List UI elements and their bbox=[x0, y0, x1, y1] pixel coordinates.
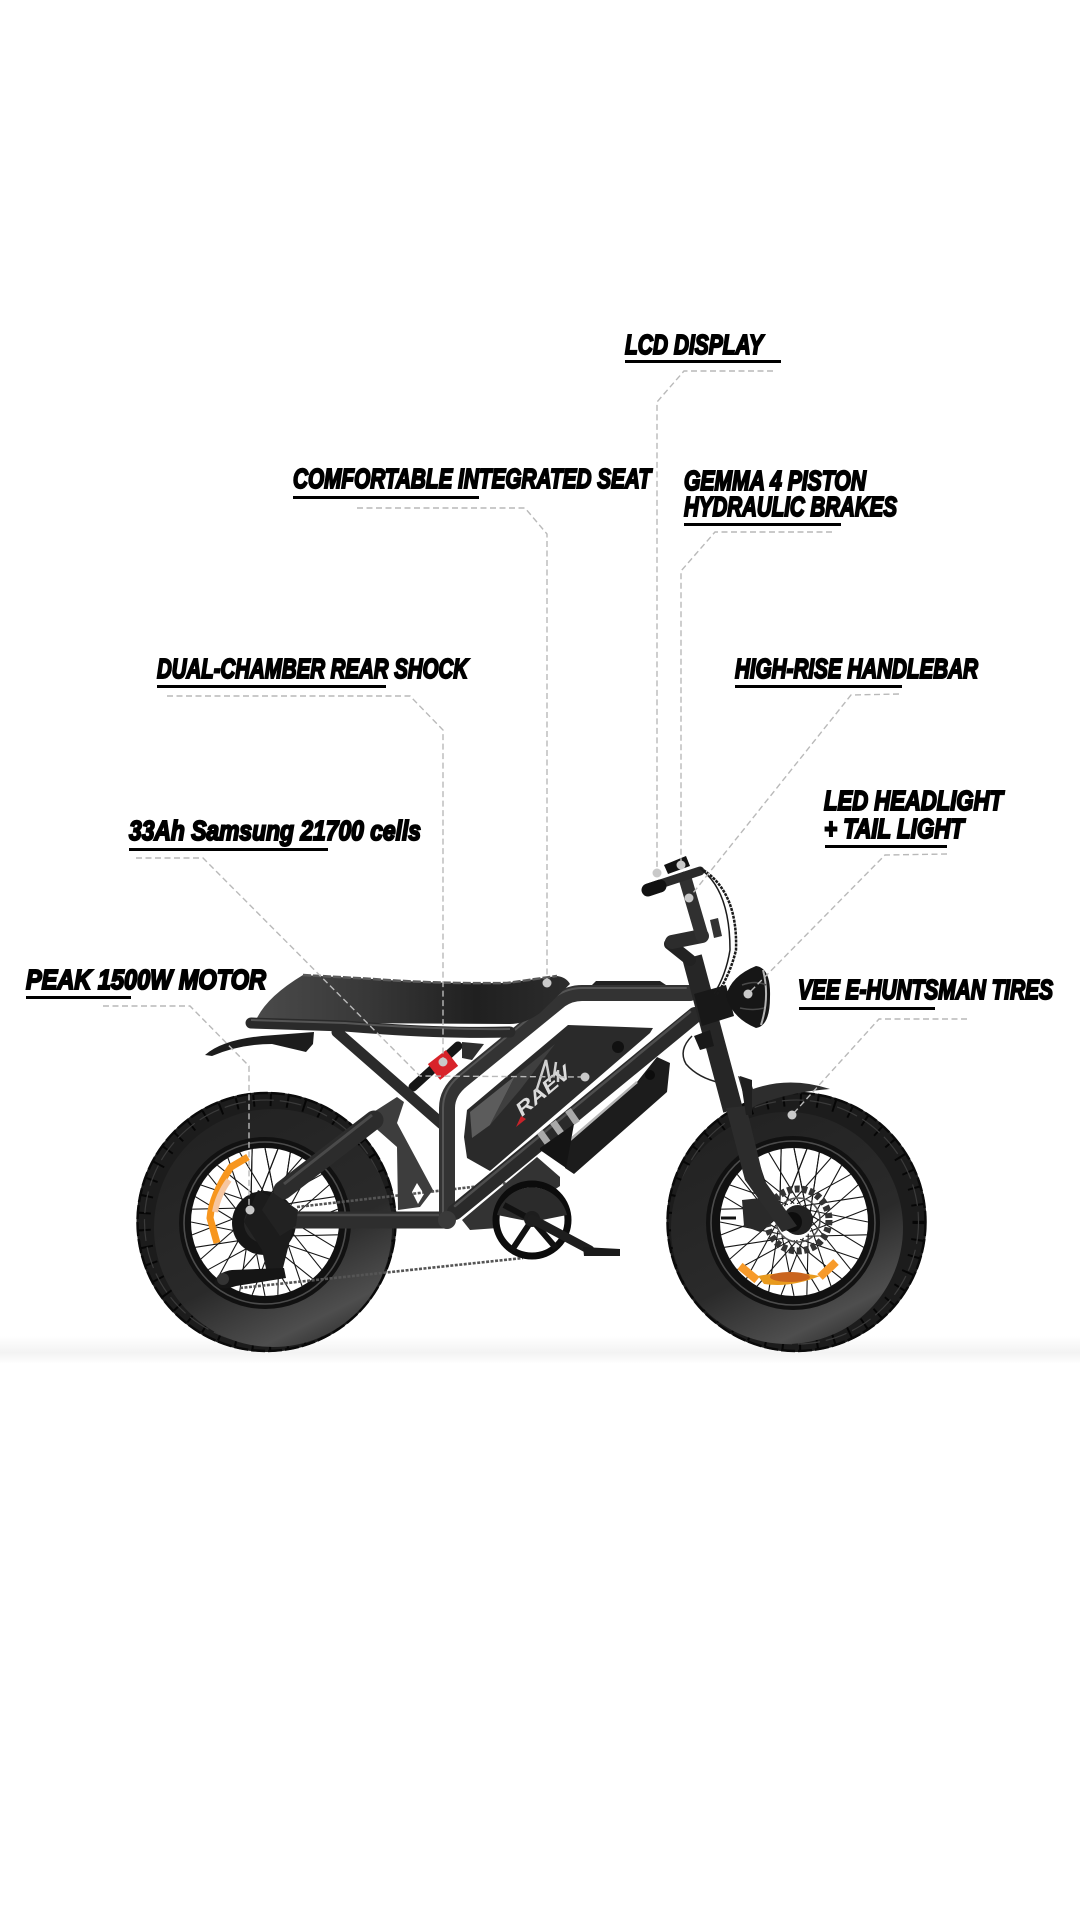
callout: hydraulic brakes bbox=[676, 465, 897, 870]
fork bbox=[692, 957, 797, 1232]
callout: hydraulic brakes: HYDRAULIC BRAKES bbox=[684, 491, 897, 522]
callout: motor bbox=[26, 964, 267, 1214]
callout: rear shock bbox=[157, 653, 469, 1066]
front reflectors bbox=[740, 1262, 836, 1285]
headlight bbox=[726, 966, 770, 1028]
callout: headlight and tail light: + TAIL LIGHT bbox=[824, 813, 966, 844]
chain bbox=[240, 1183, 523, 1288]
rear fender bbox=[205, 1032, 314, 1056]
seat strut bbox=[337, 1032, 442, 1124]
callout: headlight and tail light bbox=[744, 785, 1005, 998]
battery logo: RAEV bbox=[512, 1061, 577, 1121]
callout: rear shock: DUAL-CHAMBER REAR SHOCK bbox=[157, 653, 469, 684]
callout: LCD display: LCD DISPLAY bbox=[625, 329, 765, 360]
callout: handlebar: HIGH-RISE HANDLEBAR bbox=[735, 653, 979, 684]
seat rail bbox=[251, 1020, 510, 1032]
brake cable bbox=[683, 1036, 721, 1083]
callout: comfortable integrated seat: COMFORTABLE INTEGRATED SEAT bbox=[293, 463, 653, 494]
rear reflector bbox=[210, 1157, 248, 1243]
front wheel bbox=[666, 1092, 926, 1352]
top tube display plate bbox=[592, 981, 666, 985]
stem and handlebar bbox=[648, 856, 722, 960]
seat bbox=[257, 975, 570, 1024]
battery bbox=[464, 1025, 653, 1171]
ground shadow bbox=[0, 1336, 1080, 1364]
rear shock bbox=[413, 1042, 484, 1087]
callout: motor: PEAK 1500W MOTOR bbox=[26, 964, 267, 995]
callout: battery cells bbox=[129, 815, 590, 1082]
motor guard bbox=[462, 1157, 560, 1230]
callout: headlight and tail light: LED HEADLIGHT bbox=[824, 785, 1005, 816]
rear stay bbox=[283, 1115, 374, 1190]
swingarm bbox=[262, 1192, 445, 1236]
callout: tires bbox=[788, 974, 1053, 1120]
chainring and crank bbox=[496, 1184, 620, 1256]
bracket plate bbox=[372, 1097, 433, 1210]
cables bbox=[700, 868, 736, 996]
downtube stripes bbox=[540, 1110, 577, 1146]
side bag bbox=[540, 1057, 670, 1174]
front fender bbox=[738, 1076, 830, 1110]
callout: comfortable integrated seat bbox=[293, 463, 653, 988]
callout: battery cells: 33Ah Samsung 21700 cells bbox=[129, 815, 421, 846]
brake disc bbox=[767, 1189, 829, 1251]
callout: handlebar bbox=[684, 653, 979, 902]
rear wheel bbox=[136, 1092, 396, 1352]
callout: LCD display bbox=[625, 329, 781, 878]
e-bike illustration bbox=[136, 856, 926, 1352]
main frame tubes bbox=[438, 988, 695, 1229]
callout: hydraulic brakes: GEMMA 4 PISTON bbox=[684, 465, 867, 496]
